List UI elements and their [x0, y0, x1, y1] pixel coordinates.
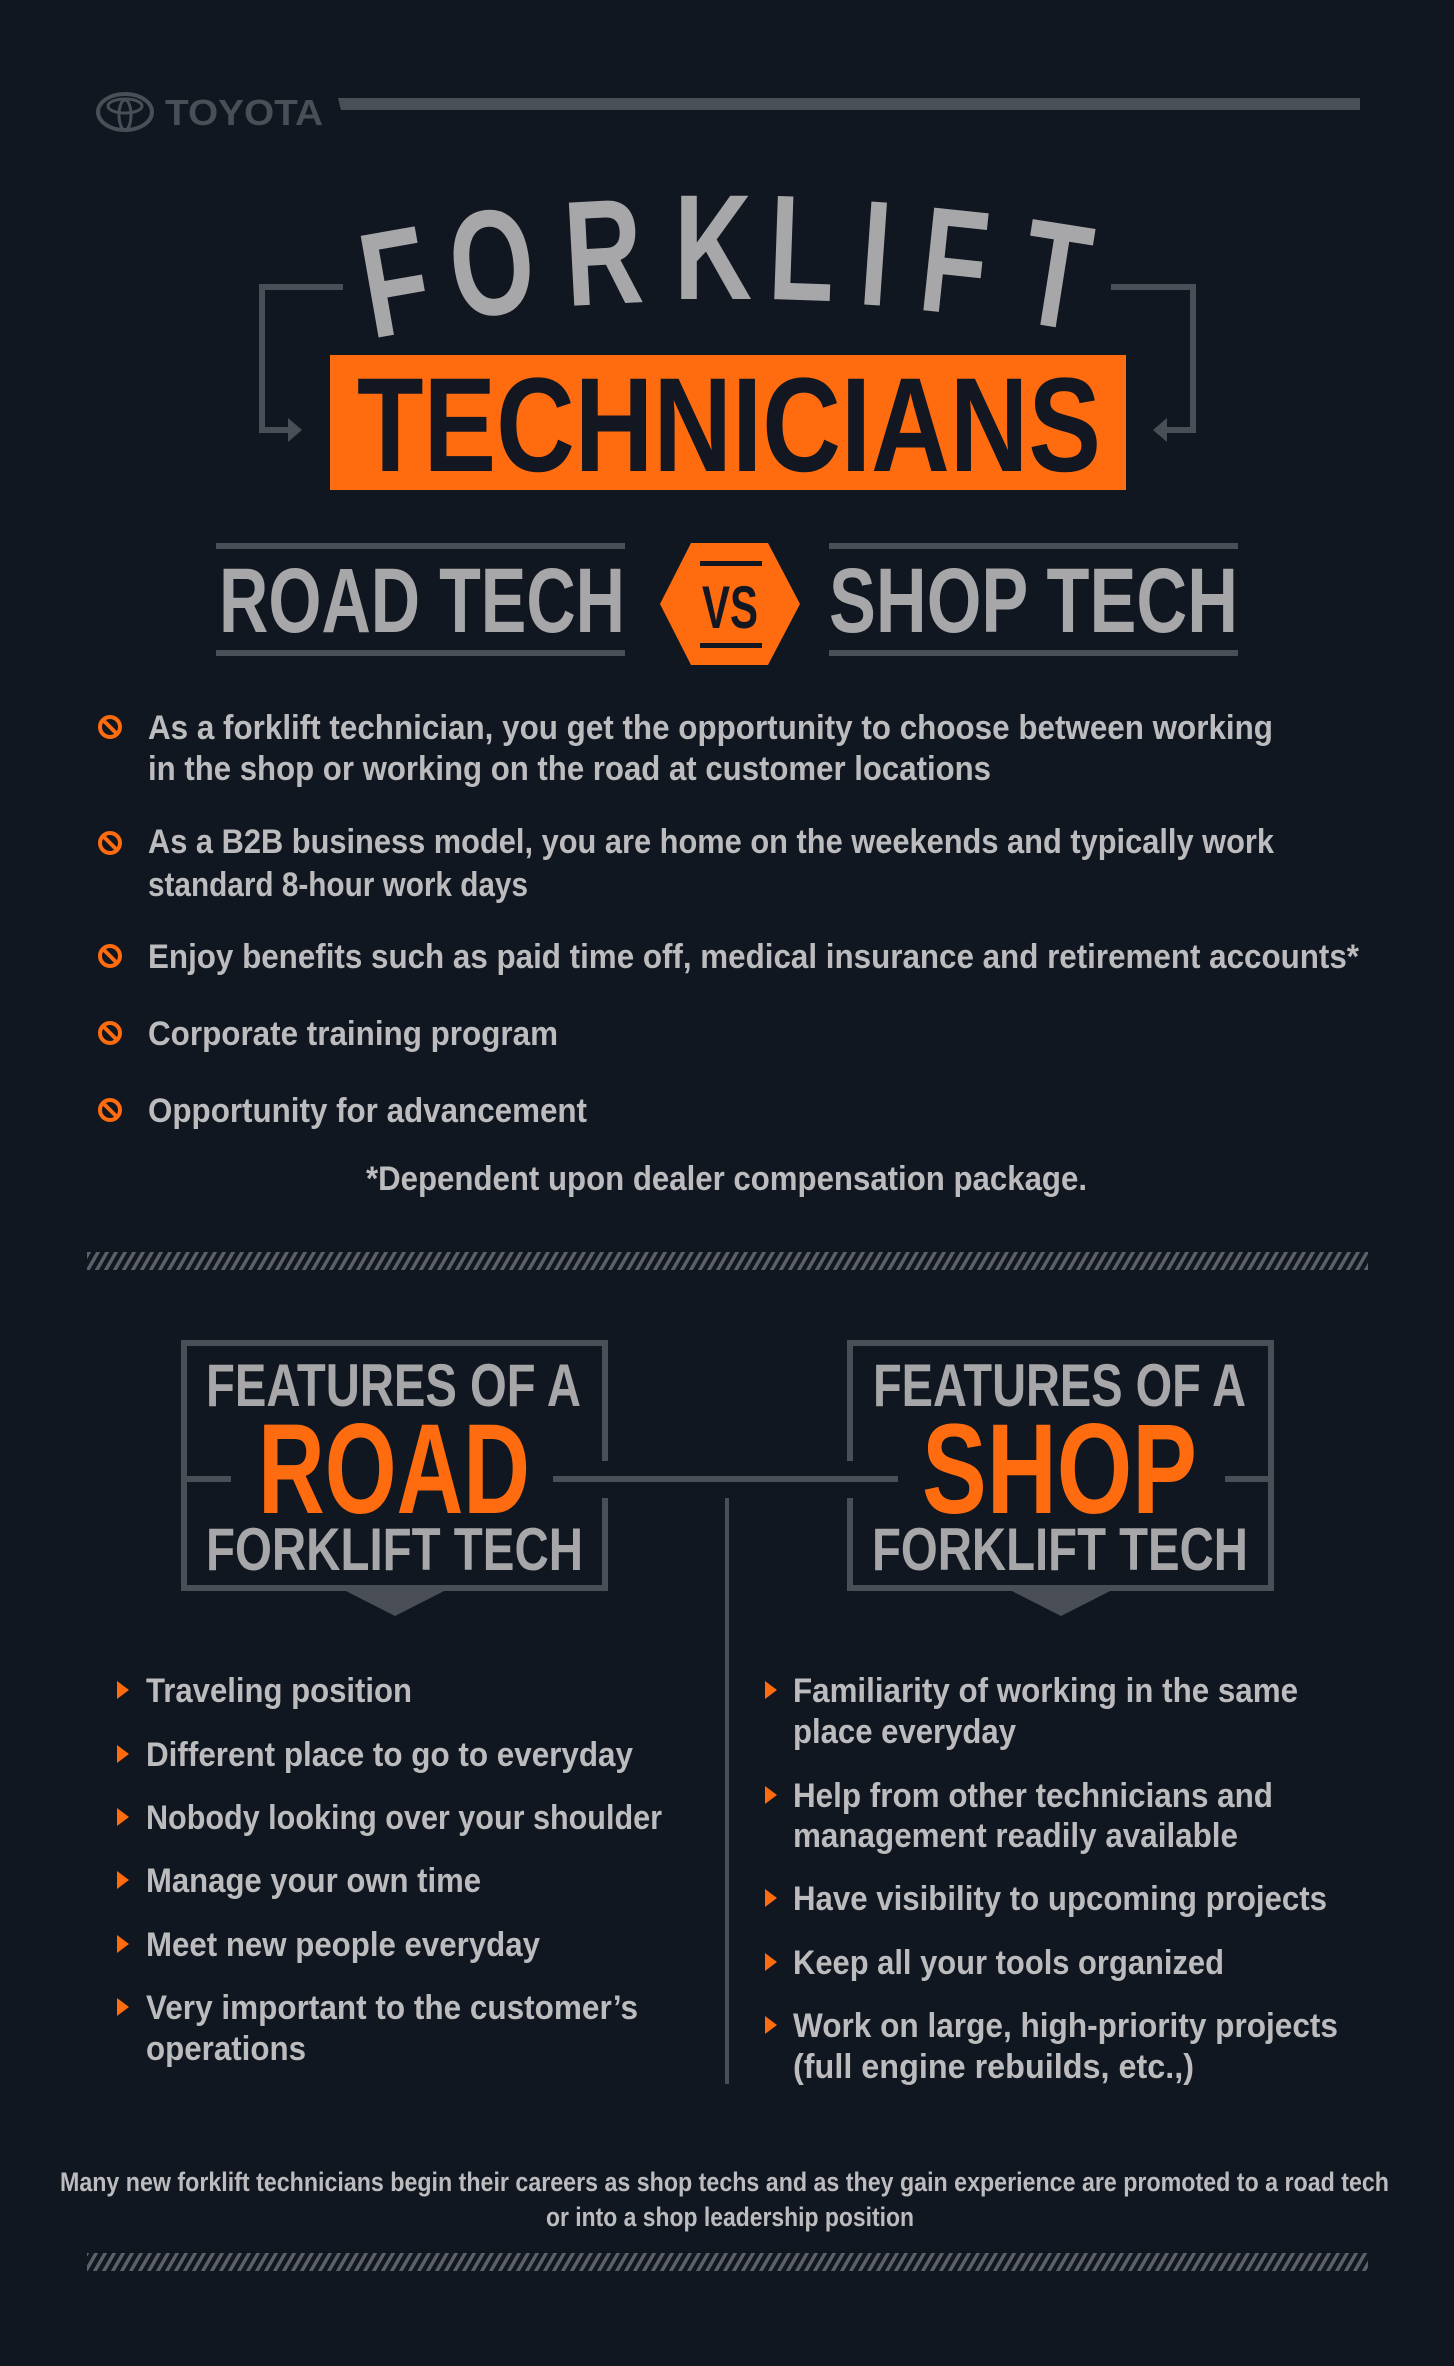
list: shop tech features	[765, 1672, 1338, 2086]
title: forklift arched: R	[560, 167, 647, 338]
title: forklift arched: T	[1010, 187, 1102, 363]
bullet 3: Enjoy benefits such as paid time off, medical insurance and retirement accounts*	[148, 938, 1360, 976]
title: forklift arched	[348, 164, 1102, 370]
connector lines	[553, 1476, 898, 2084]
list: shop tech features: Familiarity of working in the same	[793, 1672, 1298, 1710]
panel: shop tech box	[847, 1340, 1274, 1616]
list: road tech features: Very important to the customer’s	[146, 1989, 638, 2027]
panel: shop tech box: FORKLIFT TECH	[872, 1516, 1248, 1583]
bracket arrow: right	[1111, 287, 1193, 442]
heading: shop tech: SHOP TECH	[829, 550, 1238, 652]
pointer	[1006, 1588, 1116, 1616]
list: road tech features: Nobody looking over your shoulder	[146, 1799, 662, 1837]
title: forklift arched: L	[766, 164, 838, 333]
panel: shop tech box: FEATURES OF A	[873, 1352, 1246, 1419]
bullet 4: Corporate training program	[148, 1015, 558, 1053]
list: shop tech features: place everyday	[793, 1713, 1016, 1751]
closing note: or into a shop leadership position	[546, 2202, 914, 2232]
bullet 2	[100, 823, 1274, 904]
bracket arrow: left	[262, 287, 343, 442]
list: road tech features: Different place to go to everyday	[146, 1736, 633, 1774]
panel: road tech box: ROAD	[258, 1398, 530, 1541]
title: technicians banner: TECHNICIANS	[357, 351, 1101, 500]
bullet list: intro benefits	[100, 709, 1360, 1130]
bullet 2: As a B2B business model, you are home on the weekends and typically work	[148, 823, 1274, 861]
closing note	[60, 2167, 1389, 2232]
bullet 2: standard 8-hour work days	[148, 866, 528, 904]
footnote: *Dependent upon dealer compensation package.	[366, 1160, 1087, 1198]
bullet 1: As a forklift technician, you get the opportunity to choose between working	[148, 709, 1273, 747]
logo: toyota	[98, 92, 1360, 133]
panel: road tech box: FEATURES OF A	[206, 1352, 581, 1419]
list: road tech features	[117, 1672, 662, 2068]
bullet 1	[100, 709, 1273, 788]
logo: toyota: TOYOTA	[165, 92, 323, 133]
panel: road tech box: FORKLIFT TECH	[206, 1516, 583, 1583]
title: forklift arched: F	[348, 194, 442, 370]
icon: vs hexagon	[660, 543, 800, 665]
bullet 1: in the shop or working on the road at customer locations	[148, 750, 991, 788]
list: shop tech features: Have visibility to upcoming projects	[793, 1880, 1327, 1918]
list: road tech features: Meet new people everyday	[146, 1926, 540, 1964]
list: shop tech features: Work on large, high-priority projects	[793, 2007, 1338, 2045]
list: road tech features: Manage your own time	[146, 1862, 481, 1900]
panel: road tech box	[181, 1340, 608, 1616]
list: shop tech features: Help from other technicians and	[793, 1777, 1273, 1815]
list: road tech features: operations	[146, 2030, 306, 2068]
list: road tech features: Traveling position	[146, 1672, 412, 1710]
bullet 5: Opportunity for advancement	[148, 1092, 587, 1130]
heading: road tech: ROAD TECH	[219, 550, 625, 652]
pointer	[340, 1588, 450, 1616]
title: forklift arched: F	[913, 175, 996, 348]
title: forklift arched: O	[440, 174, 544, 351]
list: shop tech features: (full engine rebuilds, etc.,)	[793, 2048, 1194, 2086]
list: shop tech features: management readily available	[793, 1817, 1238, 1855]
list: shop tech features: Keep all your tools organized	[793, 1944, 1224, 1982]
title: forklift arched: K	[674, 164, 752, 331]
icon: vs hexagon: VS	[702, 574, 758, 641]
panel: shop tech box: SHOP	[922, 1398, 1197, 1541]
heading: road tech	[216, 543, 625, 656]
title: forklift arched: I	[855, 169, 896, 338]
